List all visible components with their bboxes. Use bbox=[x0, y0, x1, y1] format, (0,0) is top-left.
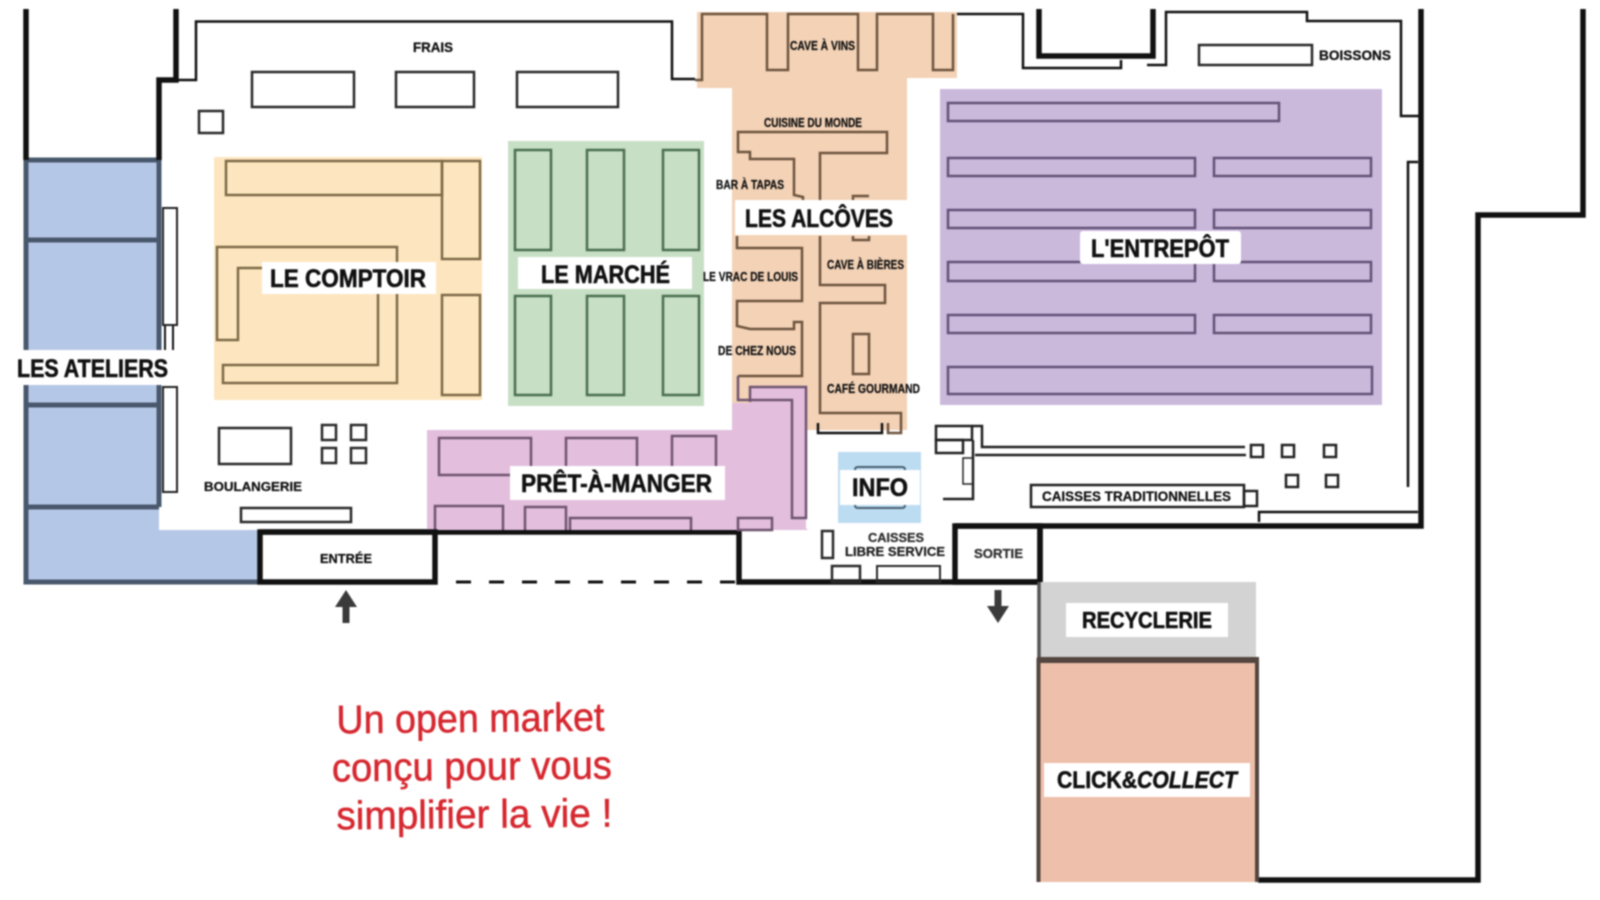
section: boissons bbox=[1199, 45, 1391, 65]
label: le comptoir: LE COMPTOIR bbox=[270, 265, 426, 293]
entrance box: ENTRÉE bbox=[320, 551, 372, 566]
label: les alcôves: LES ALCÔVES bbox=[745, 203, 893, 233]
caisses traditionnelles: CAISSES TRADITIONNELLES bbox=[1042, 489, 1231, 504]
zone: les alcôves: CAVE À VINS bbox=[790, 38, 855, 53]
zone: les ateliers bbox=[10, 160, 260, 582]
entrance box bbox=[260, 532, 435, 582]
caisses libre service: CAISSES bbox=[868, 531, 924, 545]
slogan: conçu pour vous bbox=[332, 744, 612, 790]
label: les ateliers: LES ATELIERS bbox=[17, 355, 168, 383]
section: boulangerie bbox=[204, 425, 366, 522]
label: recyclerie bbox=[1066, 603, 1228, 637]
zone: les alcôves: CAFÉ GOURMAND bbox=[827, 381, 920, 396]
section: frais: FRAIS bbox=[413, 39, 453, 55]
caisses traditionnelles bbox=[936, 426, 1338, 507]
zone: info: INFO bbox=[852, 474, 908, 502]
label: recyclerie: RECYCLERIE bbox=[1082, 607, 1212, 633]
arrow: sortie bbox=[987, 590, 1009, 623]
zone: le comptoir bbox=[214, 157, 482, 400]
zone: recyclerie bbox=[1039, 582, 1256, 657]
section: boissons: BOISSONS bbox=[1319, 47, 1391, 63]
slogan: Un open market bbox=[336, 696, 605, 742]
zone: les alcôves bbox=[695, 12, 957, 433]
section: boulangerie: BOULANGERIE bbox=[204, 480, 302, 494]
label: click & collect: CLICK&COLLECT bbox=[1057, 767, 1239, 794]
zone: l'entrepôt bbox=[940, 89, 1382, 405]
zone: les alcôves: LE VRAC DE LOUIS bbox=[703, 270, 798, 284]
label: le marché: LE MARCHÉ bbox=[541, 260, 670, 289]
exit box: SORTIE bbox=[974, 547, 1023, 561]
caisses libre service bbox=[822, 531, 945, 582]
arrow: entrée bbox=[335, 590, 357, 623]
slogan: simplifier la vie ! bbox=[336, 792, 613, 838]
zone: les alcôves: DE CHEZ NOUS bbox=[718, 344, 796, 358]
label: prêt-à-manger: PRÊT-À-MANGER bbox=[521, 468, 712, 498]
zone: les alcôves: CUISINE DU MONDE bbox=[764, 116, 862, 130]
zone: les alcôves: BAR À TAPAS bbox=[716, 177, 784, 192]
zone: les alcôves: CAVE À BIÈRES bbox=[827, 257, 904, 272]
slogan bbox=[331, 696, 613, 838]
zone: click & collect bbox=[1037, 660, 1259, 882]
zone: prêt-à-manger bbox=[427, 376, 808, 530]
caisses libre service: LIBRE SERVICE bbox=[845, 545, 945, 559]
exit box bbox=[955, 526, 1040, 582]
zone: le marché bbox=[508, 141, 704, 406]
section: frais bbox=[199, 39, 618, 133]
zone: info bbox=[838, 452, 921, 523]
label: l'entrepôt: L'ENTREPÔT bbox=[1091, 233, 1229, 263]
